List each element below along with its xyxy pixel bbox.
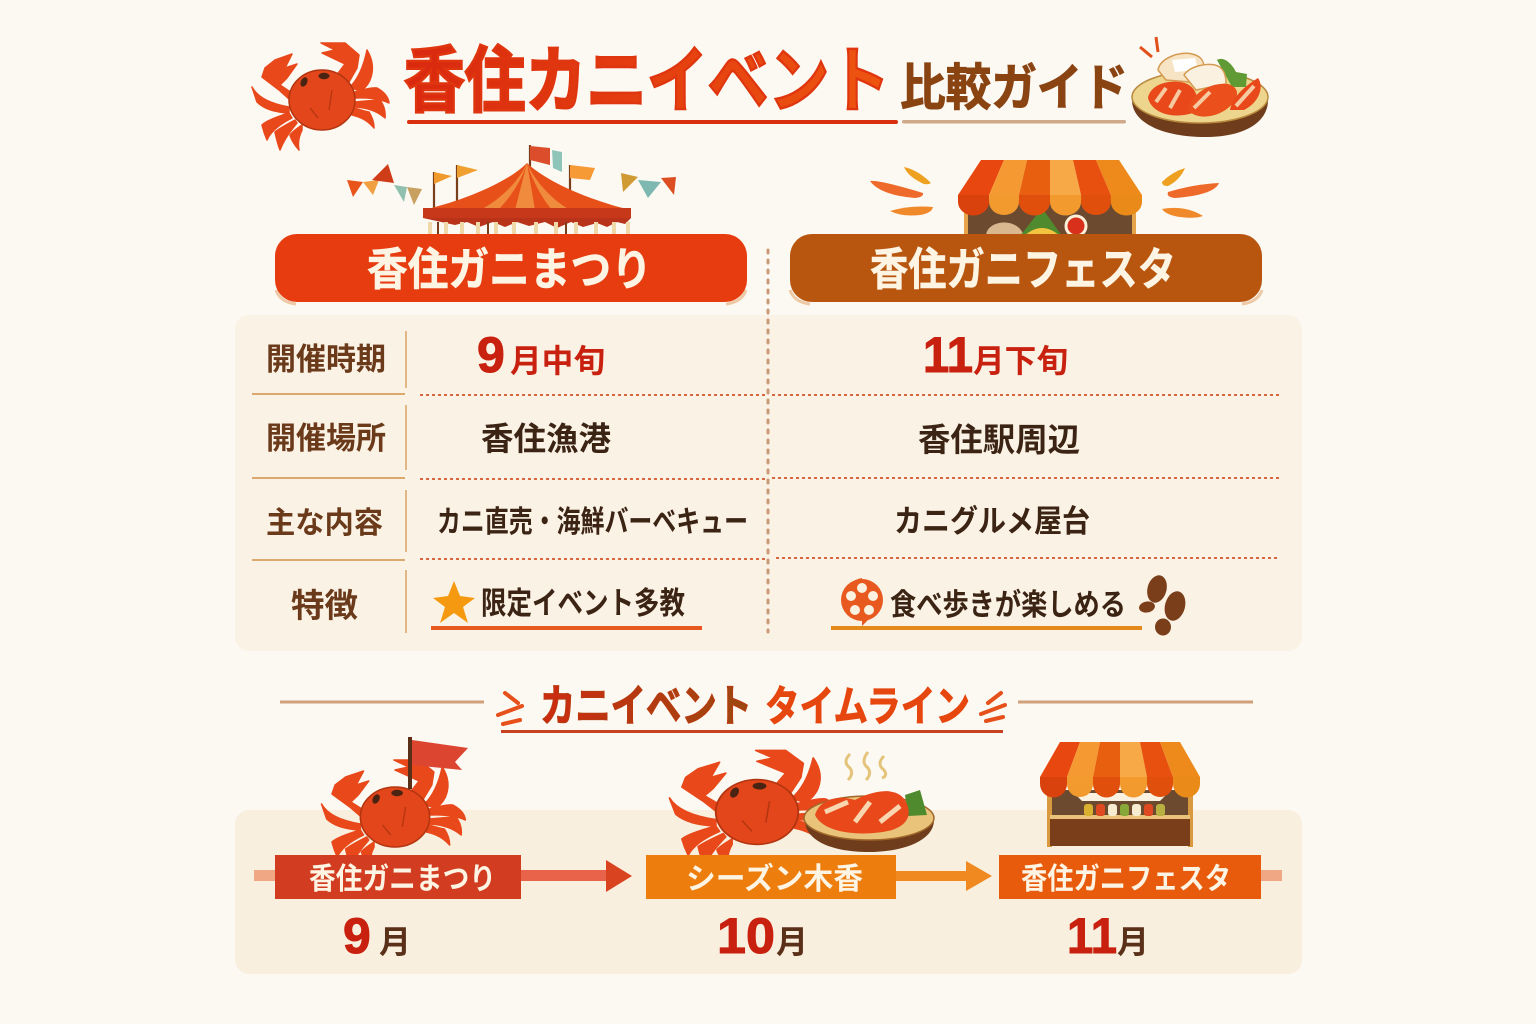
icon: crab with plate (670, 750, 934, 866)
timeline heading: タイムライン (765, 683, 970, 730)
row: 開催場所: 開催場所 (266, 421, 386, 456)
timeline month labels: 10 (717, 908, 775, 964)
row: 開催時期 (266, 327, 1068, 383)
row: 開催時期: 月下旬 (973, 343, 1068, 379)
header: 香住ガニまつり: 香住ガニまつり (367, 244, 652, 295)
header: 香住ガニフェスタ (790, 234, 1262, 304)
timeline box: 香住ガニフェスタ: 香住ガニフェスタ (1021, 863, 1231, 896)
timeline month labels: 11 (1067, 908, 1117, 964)
icon: star (433, 581, 475, 623)
icon: film reel (841, 578, 883, 626)
icon: food stall with sparks (870, 160, 1219, 236)
icon: festival tent with flags (347, 145, 676, 236)
header: 香住ガニフェスタ: 香住ガニフェスタ (870, 244, 1176, 295)
timeline box: 香住ガニまつり (275, 855, 521, 899)
row: 特徴 (291, 586, 1142, 630)
timeline track and arrows (254, 860, 1282, 892)
row: 特徴: 限定イベント多教 (481, 586, 685, 621)
row: 開催時期: 開催時期 (266, 342, 386, 377)
icon: header crab plate (1132, 37, 1268, 137)
header: 香住ガニまつり (275, 234, 747, 304)
row: 開催時期: 11 (923, 327, 973, 383)
row: 特徴: 食べ歩きが楽しめる (890, 588, 1126, 622)
timeline month labels: 月 (1117, 924, 1149, 960)
icon: header crab (252, 43, 389, 150)
timeline box: 香住ガニフェスタ (999, 855, 1261, 899)
panel: comparison table background (235, 315, 1302, 651)
row: 開催場所: 香住漁港 (481, 421, 611, 457)
title: 比較ガイド (900, 60, 1128, 116)
timeline month labels (343, 908, 1149, 964)
panel: timeline background (235, 810, 1302, 974)
row: 主な内容: 主な内容 (266, 507, 383, 540)
timeline month labels: 月 (776, 924, 808, 960)
row: 主な内容: カニグルメ屋台 (894, 504, 1090, 539)
timeline heading (280, 682, 1253, 733)
row: 開催場所: 香住駅周辺 (918, 422, 1080, 458)
timeline heading: カニイベント (540, 682, 752, 731)
icon: crab with flag (322, 737, 468, 867)
timeline month labels: 9 (343, 908, 371, 964)
icon: footprints (1138, 573, 1189, 636)
timeline month labels: 月 (379, 924, 411, 960)
row: 特徴: 特徴 (291, 587, 358, 624)
row: 主な内容: カニ直売・海鮮バーベキュー (437, 506, 748, 539)
row: 開催時期: 9 (477, 327, 505, 383)
title: 香住カニイベント (404, 42, 890, 122)
timeline box: 香住ガニまつり: 香住ガニまつり (309, 863, 496, 896)
row: 開催場所 (266, 421, 1080, 458)
icon: timeline stall (1040, 742, 1200, 847)
row: 主な内容 (266, 504, 1090, 540)
timeline box: シーズン木香: シーズン木香 (686, 862, 863, 896)
timeline box: シーズン木香 (646, 855, 896, 899)
row: 開催時期: 月中旬 (510, 343, 605, 379)
